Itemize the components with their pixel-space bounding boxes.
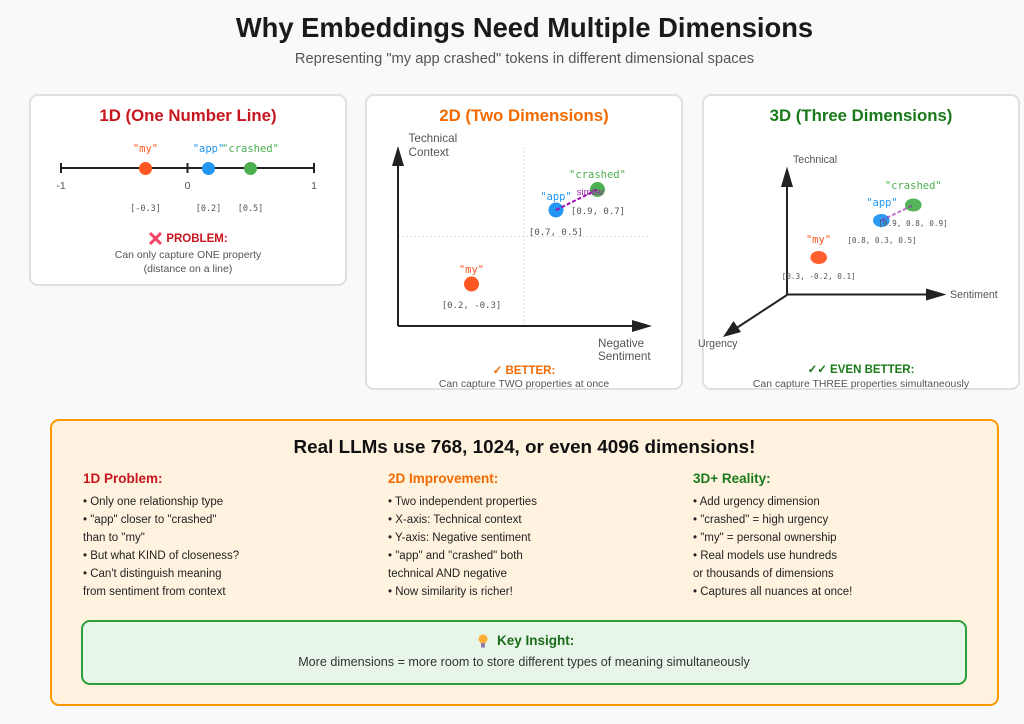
token: app — [193, 143, 224, 214]
axis labels: Technical — [793, 154, 837, 166]
token: my: [-0.3] — [130, 204, 161, 214]
better label: ✓ BETTER: — [493, 365, 555, 377]
icon: cross — [150, 233, 161, 244]
token: app — [529, 191, 583, 238]
token: my: [0.2, -0.3] — [442, 301, 501, 311]
tick labels: -1 — [56, 180, 66, 192]
axes — [392, 146, 652, 332]
token: app: [0.7, 0.5] — [529, 228, 583, 238]
token: crashed: "crashed" — [222, 143, 279, 155]
axes — [723, 166, 946, 337]
tick labels: 1 — [311, 180, 317, 192]
x axis label: Sentiment — [598, 350, 651, 363]
column: 1D problem: • But what KIND of closeness? — [83, 550, 239, 562]
heading: 2D: 2D (Two Dimensions) — [439, 106, 609, 125]
token: app: [0.2] — [196, 204, 221, 214]
even better label: ✓✓ EVEN BETTER: — [808, 364, 914, 376]
problem text: Can only capture ONE property — [115, 249, 262, 261]
token: my — [442, 264, 501, 311]
heading: 1D: 1D (One Number Line) — [99, 106, 277, 125]
column: 2D improvement — [388, 471, 537, 598]
token: app — [847, 197, 917, 245]
x axis label: Negative — [598, 337, 644, 350]
token: crashed — [569, 169, 626, 217]
y axis label: Technical — [408, 132, 457, 145]
heading: 3D: 3D (Three Dimensions) — [770, 106, 952, 125]
token: app: "app" — [866, 197, 898, 209]
column: 2D improvement: technical AND negative — [388, 568, 507, 580]
token: my: "my" — [806, 234, 831, 246]
token: crashed: [0.9, 0.7] — [571, 207, 625, 217]
grid lines — [398, 147, 650, 325]
column: 3D+ reality: • "my" = personal ownership — [693, 532, 837, 544]
token: crashed: "crashed" — [569, 169, 626, 181]
token: app: "app" — [193, 143, 224, 155]
column: 3D+ reality: • Add urgency dimension — [693, 496, 820, 508]
column: 2D improvement: 2D Improvement: — [388, 471, 498, 486]
panel: 2D — [366, 95, 682, 390]
column: 3D+ reality: • "crashed" = high urgency — [693, 514, 829, 526]
tick labels: 0 — [185, 180, 191, 192]
token: my — [782, 234, 856, 281]
token: crashed: [0.5] — [238, 204, 263, 214]
y axis label: Context — [408, 146, 450, 159]
token: my: "my" — [133, 143, 158, 155]
column: 1D problem: • Can't distinguish meaning — [83, 568, 222, 580]
column: 2D improvement: • X-axis: Technical context — [388, 514, 522, 526]
column: 3D+ reality — [693, 471, 852, 598]
panel: 1D — [30, 95, 346, 285]
column: 3D+ reality: • Real models use hundreds — [693, 550, 837, 562]
callout: key insight — [82, 621, 966, 684]
token: crashed: "crashed" — [885, 180, 942, 192]
tick labels — [56, 180, 317, 192]
token: crashed: [0.9, 0.8, 0.9] — [878, 219, 948, 228]
axis labels: Urgency — [698, 338, 738, 350]
token: app: "app" — [540, 191, 572, 203]
panel: real LLMs — [51, 420, 998, 705]
column: 1D problem: than to "my" — [83, 532, 145, 544]
token: my: [0.3, -0.2, 0.1] — [782, 272, 856, 281]
token: my: "my" — [459, 264, 484, 276]
similarity link: similar — [577, 187, 604, 198]
column: 2D improvement: • Now similarity is richer! — [388, 586, 513, 598]
token: crashed — [222, 143, 279, 214]
column: 2D improvement: • Y-axis: Negative sentiment — [388, 532, 532, 544]
icon: light bulb — [478, 634, 488, 648]
heading: real LLMs: Real LLMs use 768, 1024, or even 4096 dimensions! — [294, 436, 755, 457]
column: 3D+ reality: • Captures all nuances at once! — [693, 586, 852, 598]
axis labels — [698, 154, 998, 350]
token: my — [130, 143, 161, 214]
number line — [61, 163, 314, 173]
problem label: PROBLEM: — [166, 233, 228, 245]
column: 2D improvement: • "app" and "crashed" both — [388, 550, 523, 562]
subtitle: Representing "my app crashed" tokens in different dimensional spaces — [295, 51, 754, 67]
column: 1D problem: from sentiment from context — [83, 586, 226, 598]
problem text: (distance on a line) — [144, 263, 232, 275]
column: 1D problem: • Only one relationship type — [83, 496, 223, 508]
token: app: [0.8, 0.3, 0.5] — [847, 236, 917, 245]
token: crashed — [878, 180, 948, 228]
column: 3D+ reality: or thousands of dimensions — [693, 568, 834, 580]
column: 2D improvement: • Two independent properties — [388, 496, 537, 508]
title: Why Embeddings Need Multiple Dimensions — [236, 12, 813, 43]
column: 1D problem — [83, 471, 239, 598]
even better text: Can capture THREE properties simultaneously — [753, 379, 970, 390]
column: 3D+ reality: 3D+ Reality: — [693, 471, 771, 486]
key insight text: More dimensions = more room to store different types of meaning simultaneously — [298, 655, 751, 669]
key insight heading: Key Insight: — [497, 633, 574, 648]
column: 1D problem: • "app" closer to "crashed" — [83, 514, 217, 526]
similarity link — [556, 187, 604, 210]
axis labels: Sentiment — [950, 289, 998, 301]
better text: Can capture TWO properties at once — [439, 379, 609, 390]
similarity link — [881, 205, 913, 220]
column: 1D problem: 1D Problem: — [83, 471, 163, 486]
panel: 3D — [698, 95, 1019, 390]
